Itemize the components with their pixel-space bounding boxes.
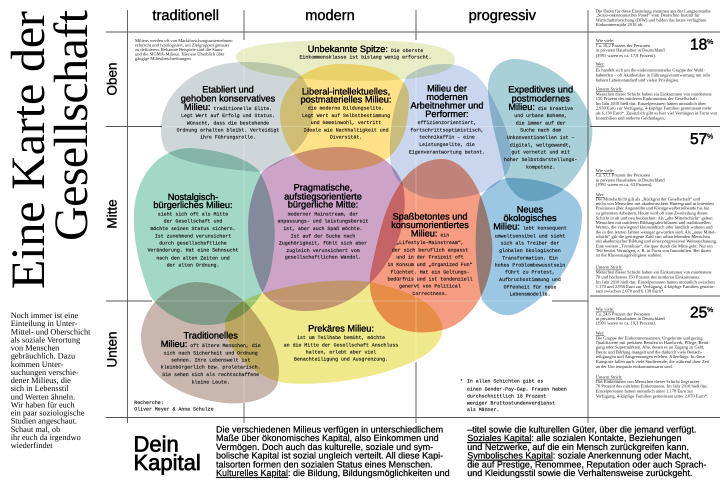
panel: Unterschicht 25 Prozent: Ca. 24,6 Prozent der Personen — [596, 312, 651, 317]
milieu: Nostalgisch-bürgerlich: der alten Ordnung. — [167, 262, 219, 268]
milieu: Neues ökologisches: sich als Treiber der — [501, 241, 559, 247]
panel: Mittelschicht 57 Prozent: 70 und höchstens 150 Prozent des mittleren Einkommens. — [596, 274, 700, 279]
footnote: als Männer. — [467, 407, 499, 413]
text: Kapital column 2: –titel sowie die kulturellen Güter, über die jemand verfügt. — [467, 424, 696, 434]
milieu: Prekär: Prekäres Milieu: — [308, 323, 374, 333]
panel: Oberschicht 18 Prozent: Menschen dieser Schicht haben ein Einkommen von mindestens — [596, 91, 712, 96]
intro text: Mittel- und Oberschicht — [11, 327, 91, 336]
data source note: Die Daten für diese Einstufung stammen aus der Langzeitstudie — [596, 8, 711, 13]
milieu: Expeditiv: Milieu: die kreative — [508, 102, 573, 112]
milieu: Traditionell: kleine Leute. — [192, 379, 230, 385]
panel: Oberschicht 18 Prozent: Ca. 18,2 Prozent der Personen — [596, 43, 651, 48]
milieu: Prekär: ist um Teilhabe bemüht, möchte — [297, 335, 385, 341]
milieu: Liberal-intellektuell: Legt Wert auf Selbstbestimmung — [302, 113, 390, 119]
panel: Mittelschicht 57 Prozent: die in den letzten Jahren weniger geworden sind. Als „neue Mittel- — [596, 229, 717, 234]
milieu: Etabliert: Wünscht, dass die bestehende — [187, 120, 269, 126]
milieu: Nostalgisch-bürgerlich: nach den alten Zeiten und — [156, 255, 230, 261]
milieu: Liberal-intellektuell: Liberal-intellektuelles, — [302, 86, 390, 96]
text: Kapital column 2: Soziales Kapital: alle sozialen Kontakte, Beziehungen — [467, 433, 681, 443]
milieu: Nostalgisch-bürgerlich: durch gesellschaftliche — [159, 241, 227, 247]
milieu: Pragmatisch: bürgerliche Mitte: — [288, 199, 358, 209]
milieu: Prekär: Benachteiligung und Ausgrenzung. — [294, 357, 388, 363]
methodology note — [135, 38, 233, 61]
milieu: Arbeitnehmer und Performer: Leistungselite, die — [419, 142, 475, 148]
milieu: Neues ökologisches: Transformation. Ein — [502, 255, 558, 261]
methodology note: zu definieren. Bekannte Beispiele sind die Sinus- — [135, 47, 224, 52]
panel: Mittelschicht 57 Prozent: Ca. 57,1 Prozent der Personen — [596, 173, 651, 178]
text: Kapital column 1: talsorten formen den sozialen Status eines Menschen. — [216, 459, 433, 469]
text: Kapital column 2: und Netzwerke, auf die ein Mensch zurückgreifen kann. — [467, 442, 689, 452]
milieu: Nostalgisch-bürgerlich: möchte seinen Status sichern. — [150, 226, 236, 232]
milieu: Arbeitnehmer und Performer: Eigenverantwortung betont. — [409, 149, 485, 155]
panel: Unterschicht 25 Prozent: Die Gruppe der Einkommensarmen: Ungelernte und gering — [596, 335, 703, 340]
panel: Mittelschicht 57 Prozent: Menschen mit mittleren Bildungsabschlüssen und traditionellen — [596, 220, 711, 225]
methodology note: und die SIGMA-Milieus. Hier ein Überblick über — [135, 52, 225, 57]
milieu: Expeditiv — [504, 85, 577, 170]
milieu: Neues ökologisches — [493, 205, 567, 297]
milieu: Arbeitnehmer und Performer — [409, 84, 485, 155]
milieu: Traditionell: kleinbürgerlich bzw. proletarisch. — [161, 365, 261, 371]
milieu: Spaßbetont: Milieu: ein — [411, 228, 449, 238]
intro text: Einteilung in Unter- — [11, 319, 78, 328]
credits: Oliver Meyer & Anna Schulze — [134, 406, 214, 412]
milieu: Expeditiv: Unkonventionellen ist – — [507, 135, 575, 141]
methodology note: erforscht und typologisiert, um Zielgruppen genauer — [135, 43, 230, 48]
credits — [134, 400, 214, 412]
panel: Mittelschicht 57 Prozent: Teil besitzt Vermögen, z. B. in Form von Immobilien. Bei ihnen — [596, 248, 712, 253]
milieu: Expeditiv: die immer auf der — [516, 120, 566, 126]
milieu: Expeditiv: hoher Selbstdarstellungs- — [504, 157, 577, 163]
milieu: Spaßbetont: konsumorientiertes — [391, 220, 469, 230]
milieu: Traditionell: sich nach Sicherheit und Ordnung — [164, 350, 258, 356]
heading: Dein Kapital: Kapital — [134, 450, 201, 475]
panel: Oberschicht 18 Prozent: Wie viele: — [596, 38, 614, 43]
text: Kapital column 2 — [467, 424, 706, 478]
panel: Mittelschicht 57 Prozent: (1991 waren es ca. 63 Prozent). — [596, 182, 653, 187]
milieu: Unbekannte Spitze: Einkommensklasse ist bislang wenig erforscht. — [299, 55, 432, 61]
milieu: Unbekannte Spitze — [299, 44, 432, 61]
data source note: Einkommensjahr 2018 ab. — [596, 22, 643, 27]
milieu: Liberal-intellektuell: und Gemeinwohl, vertritt — [311, 120, 381, 126]
panel: Oberschicht 18 Prozent: 2.930 Euro zur Verfügung, 4-köpfige Familien gemeinsam mehr — [596, 106, 712, 111]
milieu: Liberal-intellektuell: Ideale wie Nachhaltigkeit und — [303, 128, 389, 134]
panel: Mittelschicht 57 Prozent: ist die Klassenzugehörigkeit stabiler. — [596, 253, 662, 258]
percentage 25: % — [707, 307, 713, 314]
milieu: Expeditiv: gut vernetzt und mit — [511, 150, 570, 156]
milieu: Pragmatisch: moderner Mainstream, der — [288, 211, 358, 217]
milieu: Liberal-intellektuell: die moderne Bildungselite. — [308, 106, 384, 112]
text: Kapital column 1: Die verschiedenen Milieus verfügen in unterschiedlichem — [216, 424, 443, 434]
panel: Mittelschicht 57 Prozent: 1.170 und 2.930 Euro zur Verfügung, 4-köpfige Familien gemein- — [596, 284, 715, 289]
panel: Mittelschicht 57 Prozent: Positionen über Angestellte und Kleingewerbetreibende bis hin — [596, 206, 710, 211]
percentage 57: % — [707, 134, 713, 141]
footnote: einen Gender-Pay-Gap. Frauen haben — [467, 387, 567, 393]
milieu: Pragmatisch: gesellschaftlichen Wandel. — [285, 255, 361, 261]
milieu: Etabliert: ihre Führungsrolle. — [200, 135, 256, 141]
panel: Mittelschicht 57 Prozent — [596, 168, 717, 294]
text: Kapital column 1: Vermögen. Doch auch das kulturelle, soziale und sym- — [216, 442, 433, 452]
milieu: Etabliert: Milieu: traditionelle Elite. — [184, 102, 272, 112]
milieu: Neues ökologisches: Lebensmodelle. — [509, 291, 551, 297]
footnote — [460, 378, 567, 413]
milieu: Nostalgisch-bürgerlich — [148, 192, 239, 268]
panel: Unterschicht 25 Prozent: Kategorie fallen auch viele Studierende, die während ihrer Zeit — [596, 359, 710, 364]
panel: Mittelschicht 57 Prozent: sam zwischen 2.070 und 6.130 Euro*. — [596, 289, 664, 294]
milieu: Pragmatisch: aufstiegsorientierte — [284, 191, 362, 201]
milieu: Expeditiv: kompetenz. — [526, 164, 555, 170]
axis labels: horizontal — [152, 8, 537, 24]
milieu: Arbeitnehmer und Performer: effizienzorientiert, — [418, 120, 476, 126]
milieu: Etabliert: Etabliert und — [202, 85, 254, 95]
percentage 57: 57 — [690, 131, 707, 148]
milieu: Pragmatisch: ist, aber auch Spaß möchte. — [283, 226, 363, 232]
milieu: Pragmatisch — [278, 183, 369, 261]
panel: Unterschicht 25 Prozent: Besitz und Bildung mangelt und die dadurch viele Benach- — [596, 349, 703, 354]
percentage 18: % — [707, 39, 713, 46]
panel: Mittelschicht 57 Prozent: Werten, die vorwiegend kleinstädtisch oder ländlich wohnen und — [596, 225, 713, 230]
milieu: Arbeitnehmer und Performer: Milieu der — [427, 84, 467, 94]
panel: Oberschicht 18 Prozent: Es handelt sich um die einkommensstarke Gruppe der Wohl- — [596, 68, 705, 73]
milieu: Nostalgisch-bürgerlich: bürgerliches Milieu: — [153, 200, 233, 210]
panel: Mittelschicht 57 Prozent: Die Mittelschicht gilt als „Rückgrat der Gesellschaft“ und — [596, 196, 701, 201]
panel: Oberschicht 18 Prozent: hohem Lebensstandard und vielen Privilegien. — [596, 77, 679, 82]
milieu: Spaßbetont: der sich beruflich anpasst — [392, 248, 468, 254]
milieu: Arbeitnehmer und Performer: Performer: — [425, 109, 469, 119]
milieu: Liberal-intellektuell: postmaterielles Milieu: — [301, 95, 391, 105]
panel: Oberschicht 18 Prozent: 150 Prozent des mittleren Einkommens der Gesellschaft. — [596, 96, 698, 101]
intro text: suchungen verschie- — [11, 368, 79, 377]
milieu: Spaßbetont: Correctness. — [412, 291, 448, 297]
milieu: Pragmatisch: Zugehörigkeit, fühlt sich aber — [279, 241, 367, 247]
intro text: kommen Unter- — [11, 360, 64, 369]
milieu: Neues ökologisches: Neues — [517, 205, 544, 215]
milieu: Spaßbetont: Spaßbetontes und — [392, 211, 468, 221]
milieu: Expeditiv: und urbane Boheme, — [514, 113, 567, 119]
panel: Mittelschicht 57 Prozent: schicht“ gilt die gestiegene Zahl von urban lebenden Menschen — [596, 234, 711, 239]
panel: Oberschicht 18 Prozent: (1991 waren es ca. 17,8 Prozent). — [596, 53, 656, 58]
milieu: Neues ökologisches: Offenheit für neue — [504, 284, 556, 290]
percentage 18: 18 — [690, 36, 707, 53]
milieu: Spaßbetont: und in der Freizeit oft — [396, 255, 464, 261]
panel: Unterschicht 25 Prozent: in privaten Haushalten in Deutschland — [596, 316, 665, 321]
panel: Mittelschicht 57 Prozent: Schicht in alt und neu beobachtet: Als „alte Mittelschicht“ gelten — [596, 215, 713, 220]
intro text: als soziale Verortung — [11, 335, 80, 344]
milieu: Liberal-intellektuell: Diversität. — [330, 135, 362, 141]
milieu: Nostalgisch-bürgerlich: Nostalgisch- — [168, 192, 218, 202]
panel: Unterschicht 25 Prozent: gung oder Supermärkten. Alte, denen es an Zugang zu Geld, — [596, 345, 704, 350]
milieu: Expeditiv: digital, weltgewandt, — [510, 142, 572, 148]
axis labels: horizontal: modern — [305, 8, 355, 24]
panel: Unterschicht 25 Prozent: Wie viele: — [596, 307, 614, 312]
milieu: Neues ökologisches: umweltsensibel und sieht — [495, 234, 565, 240]
axis labels: horizontal: traditionell — [152, 8, 219, 24]
milieu: Nostalgisch-bürgerlich: sieht sich oft als Mitte — [158, 211, 228, 217]
panel: Unterschicht 25 Prozent: Qualifizierte mit prekären Berufen in Handwerk, Pflege, Reini- — [596, 340, 710, 345]
methodology note: Milieus werden oft von Marktforschungsunternehmen — [135, 38, 233, 43]
footnote: durchschnittlich 18 Prozent — [467, 393, 546, 399]
milieu: Spaßbetont: bedürfnis und ist tendenziell — [387, 276, 473, 282]
panel: Oberschicht 18 Prozent: habenden – oft Akademiker in Führungsverantwortung mit sehr — [596, 72, 711, 77]
panel: Mittelschicht 57 Prozent: Im Jahr 2018 hieß das: Einzelpersonen hatten monatlich zwischen — [596, 279, 715, 284]
milieu: Arbeitnehmer und Performer: technikaffin – eine — [419, 135, 475, 141]
milieu: Arbeitnehmer und Performer: fortschrittsoptimistisch, — [410, 127, 484, 133]
panel: Mittelschicht 57 Prozent: in privaten Haushalten in Deutschland — [596, 177, 665, 182]
panel: Oberschicht 18 Prozent: in privaten Haushalten in Deutschland — [596, 48, 665, 53]
milieu: Neues ökologisches: hohes Problembewusstsein — [495, 263, 565, 269]
heading: Dein Kapital: Dein — [134, 432, 179, 457]
text: Kapital column 1 — [216, 424, 450, 478]
milieu: Arbeitnehmer und Performer: modernen — [426, 92, 468, 102]
text: Kapital column 1: Kulturelles Kapital: die Bildung, Bildungsmöglichkeiten und — [216, 468, 450, 478]
milieu: Pragmatisch: Pragmatische, — [294, 183, 352, 193]
milieu: Traditionell: sehnen. Ihre Lebenswelt ist — [171, 358, 250, 364]
panel: Unterschicht 25 Prozent: (1991 waren es ca. 19,3 Prozent). — [596, 321, 656, 326]
milieu: Expeditiv: Expeditives und — [508, 85, 573, 95]
milieu: Prekär: halten, erlebt aber viel — [306, 350, 376, 356]
milieu: Neues ökologisches: führt zu Protest, — [505, 270, 555, 276]
milieu: Nostalgisch-bürgerlich: Ist zunehmend verunsichert — [155, 233, 231, 239]
milieu: Etabliert: gehoben konservatives — [181, 93, 276, 103]
milieu: Spaßbetont: in Konsum und „Organized Fun“ — [387, 262, 473, 268]
intro text: gebräuchlich. Dazu — [11, 352, 75, 361]
milieu: Pragmatisch: Ist auf der Suche nach — [291, 233, 355, 239]
milieu: Spaßbetont: flüchtet. Hat ein Geltungs- — [390, 269, 470, 275]
panel: Unterschicht 25 Prozent — [596, 307, 710, 399]
axis labels: vertical: Unten — [105, 331, 120, 368]
milieu: Pragmatisch: anpassungs- und leistungsbereit — [278, 219, 369, 225]
intro text: dener Milieus, die — [11, 376, 71, 385]
data source note — [596, 8, 711, 27]
intro text: Studien angeschaut. — [11, 417, 77, 426]
intro text: ein paar soziologische — [11, 408, 85, 418]
text: Kapital column 1: bolische Kapital ist sozial ungleich verteilt. All diese Kapi- — [216, 451, 443, 461]
milieu: Prekär: an die Mitte der Gesellschaft Anschluss — [284, 342, 398, 348]
milieu: Arbeitnehmer und Performer: Arbeitnehmer und — [410, 100, 484, 110]
panel: Unterschicht 25 Prozent: Einzelpersonen hatten monatlich unter 1.170 Euro zur — [596, 389, 694, 394]
milieu: Expeditiv: Suche nach dem — [520, 128, 561, 134]
panel: Oberschicht 18 Prozent: Unterm Strich: — [596, 86, 623, 91]
panel: Oberschicht 18 Prozent: Im Jahr 2018 hieß das: Einzelpersonen hatten monatlich über — [596, 101, 706, 106]
text: Kapital column 2: Symbolisches Kapital: soziale Anerkennung oder Macht, — [467, 451, 691, 461]
milieu: Unbekannte Spitze: Unbekannte Spitze: Die oberste — [308, 44, 423, 54]
panel: Unterschicht 25 Prozent: Verfügung, 4-köpfige Familien gemeinsam unter 2.070 Euro*. — [596, 394, 708, 399]
intro text: von Menschen — [11, 344, 60, 352]
panel: Mittelschicht 57 Prozent: Menschen dieser Schicht haben ein Einkommen von mindestens — [596, 270, 712, 275]
panel: Unterschicht 25 Prozent: an der Uni temporär einkommensarm sind. — [596, 364, 673, 369]
milieu: Neues ökologisches: globalen ökologischen — [499, 248, 561, 254]
grid lines — [106, 10, 720, 423]
heading: Dein Kapital — [134, 432, 201, 475]
panel: Unterschicht 25 Prozent: teiligungen und Ausgrenzungen erleben. Allerdings: In diese — [596, 354, 705, 359]
panel: Mittelschicht 57 Prozent: zu gelernten Arbeitern. Heute wird oft eine Zweiteilung dieser — [596, 211, 708, 216]
milieu: Etabliert: Ordnung erhalten bleibt. Verteidigt — [177, 128, 279, 134]
intro text: ihr euch da irgendwo — [11, 433, 81, 442]
intro text: Wir haben für euch — [11, 400, 75, 409]
milieu: Traditionell: Milieu: oft ältere Menschen, die — [161, 339, 261, 349]
milieu: Traditionell — [161, 331, 261, 385]
milieu: Spaßbetont — [387, 211, 473, 297]
panel: Oberschicht 18 Prozent: Wer: — [596, 62, 604, 67]
milieu: Pragmatisch: zugleich verunsichert vom — [286, 248, 360, 254]
methodology note: gängige Milieubeschreibungen — [135, 56, 191, 61]
panel: Oberschicht 18 Prozent: Immobilien und anderen Geldanlagen. — [596, 115, 665, 120]
intro text — [11, 311, 91, 450]
axis labels: vertical: Mitte — [105, 199, 120, 229]
milieu: Nostalgisch-bürgerlich: der Gesellschaft und — [164, 219, 222, 225]
footnote: * — [460, 378, 463, 384]
footnote: weniger Bruttostundenverdienst — [467, 400, 555, 406]
milieu: Liberal-intellektuell — [301, 86, 391, 141]
panel: Unterschicht 25 Prozent: 70 Prozent des mittleren Einkommens. Im Jahr 2018 hieß das: — [596, 384, 708, 389]
data source note: Wirtschaftsforschung (DIW) und bilden das letzte verfügbare — [596, 17, 706, 22]
milieu: Prekär — [284, 323, 398, 363]
milieu: Neues ökologisches: ökologisches — [503, 213, 557, 223]
title: Eine Karte der — [2, 11, 55, 289]
text: Kapital column 2: und Kleidungsstil sowie die Verhaltensweise zurückgeht. — [467, 468, 692, 478]
panel: Unterschicht 25 Prozent: Unterm Strich: — [596, 375, 623, 380]
panel: Unterschicht 25 Prozent: Das Einkommen von Menschen dieser Schicht liegt unter — [596, 379, 700, 384]
title: Gesellschaft — [45, 9, 98, 241]
milieu: Etabliert: Legt Wert auf Erfolg und Status. — [181, 113, 275, 119]
intro text: und Werten ähneln. — [11, 392, 75, 401]
credits: Recherche: — [134, 400, 164, 406]
text: Kapital column 1: Maße über ökonomisches Kapital, also Einkommen und — [216, 433, 439, 443]
panel: Mittelschicht 57 Prozent: Wer: — [596, 192, 604, 197]
data source note: „Sozio-oekonomisches Panel“ vom Deutschen Institut für — [596, 13, 700, 18]
title — [2, 9, 98, 289]
blobs: milieu map — [134, 40, 592, 403]
percentage 25: 25 — [690, 304, 707, 321]
panel: Mittelschicht 57 Prozent: Unterm Strich: — [596, 265, 623, 270]
panel: Oberschicht 18 Prozent — [596, 38, 718, 120]
milieu: Traditionell: Traditionelles — [184, 331, 238, 341]
panel: Mittelschicht 57 Prozent: reicht von Menschen mit akademischem Hintergrund in leitenden — [596, 201, 714, 206]
milieu: Spaßbetont: „Lifestyle-Mainstream“, — [396, 240, 464, 246]
intro text: Noch immer ist eine — [11, 311, 79, 320]
panel: Mittelschicht 57 Prozent: mit akademischer Bildung und einer progressiven Weltanschauung. — [596, 239, 717, 244]
milieu: Nostalgisch-bürgerlich: Veränderung. Hat eine Sehnsucht — [148, 248, 239, 254]
milieu: Neues ökologisches: Milieu: lebt konsequent — [493, 222, 567, 232]
milieu: Etabliert — [177, 85, 279, 141]
milieu: Spaßbetont: genervt von Political — [399, 284, 461, 290]
text: Kapital column 2: die auf Prestige, Renommee, Reputation oder auch Sprach- — [467, 459, 706, 469]
intro text: wiederfindet — [11, 441, 53, 450]
panel: Mittelschicht 57 Prozent: Wie viele: — [596, 168, 614, 173]
panel: Oberschicht 18 Prozent: als 6.130 Euro*. Zusätzlich gibt es hier viel Vermögen in Form von — [596, 110, 718, 115]
panel: Mittelschicht 57 Prozent: Eine weitere „Trennlinie“, die quer durch die Mitte geht: Nur ein — [596, 243, 713, 248]
panel: Unterschicht 25 Prozent: Wer: — [596, 330, 604, 335]
axis labels: horizontal: progressiv — [469, 8, 537, 24]
axis labels: vertical — [105, 62, 120, 368]
milieu: Expeditiv: postmodernes — [512, 93, 570, 103]
footnote: In allen Schichten gibt es — [467, 378, 543, 384]
milieu: Neues ökologisches: Aufbruchsstimmung und — [499, 277, 561, 283]
milieu: Traditionell: Sie sehen sich als rechtschaffene — [162, 372, 259, 378]
axis labels: vertical: Oben — [105, 62, 120, 96]
intro text: Schaut mal, ob — [11, 425, 60, 434]
intro text: sich in Lebensstil — [11, 384, 69, 393]
